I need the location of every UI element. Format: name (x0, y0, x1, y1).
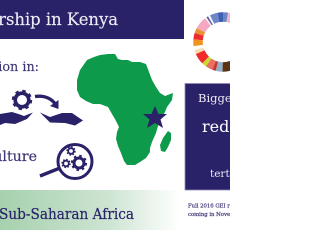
map: Africa (77, 54, 173, 165)
note: full report (188, 204, 245, 218)
icon: gear, arrow and hands (0, 91, 83, 126)
footer heading: Sub-Saharan Africa (0, 205, 134, 223)
footer band (0, 190, 180, 230)
star: Kenya (143, 106, 167, 128)
Madagascar (160, 131, 171, 152)
panel: biggest red tape (185, 84, 270, 190)
header banner (0, 0, 184, 39)
chart: colour ring (188, 7, 258, 77)
icon: magnifier with gears (40, 144, 92, 178)
